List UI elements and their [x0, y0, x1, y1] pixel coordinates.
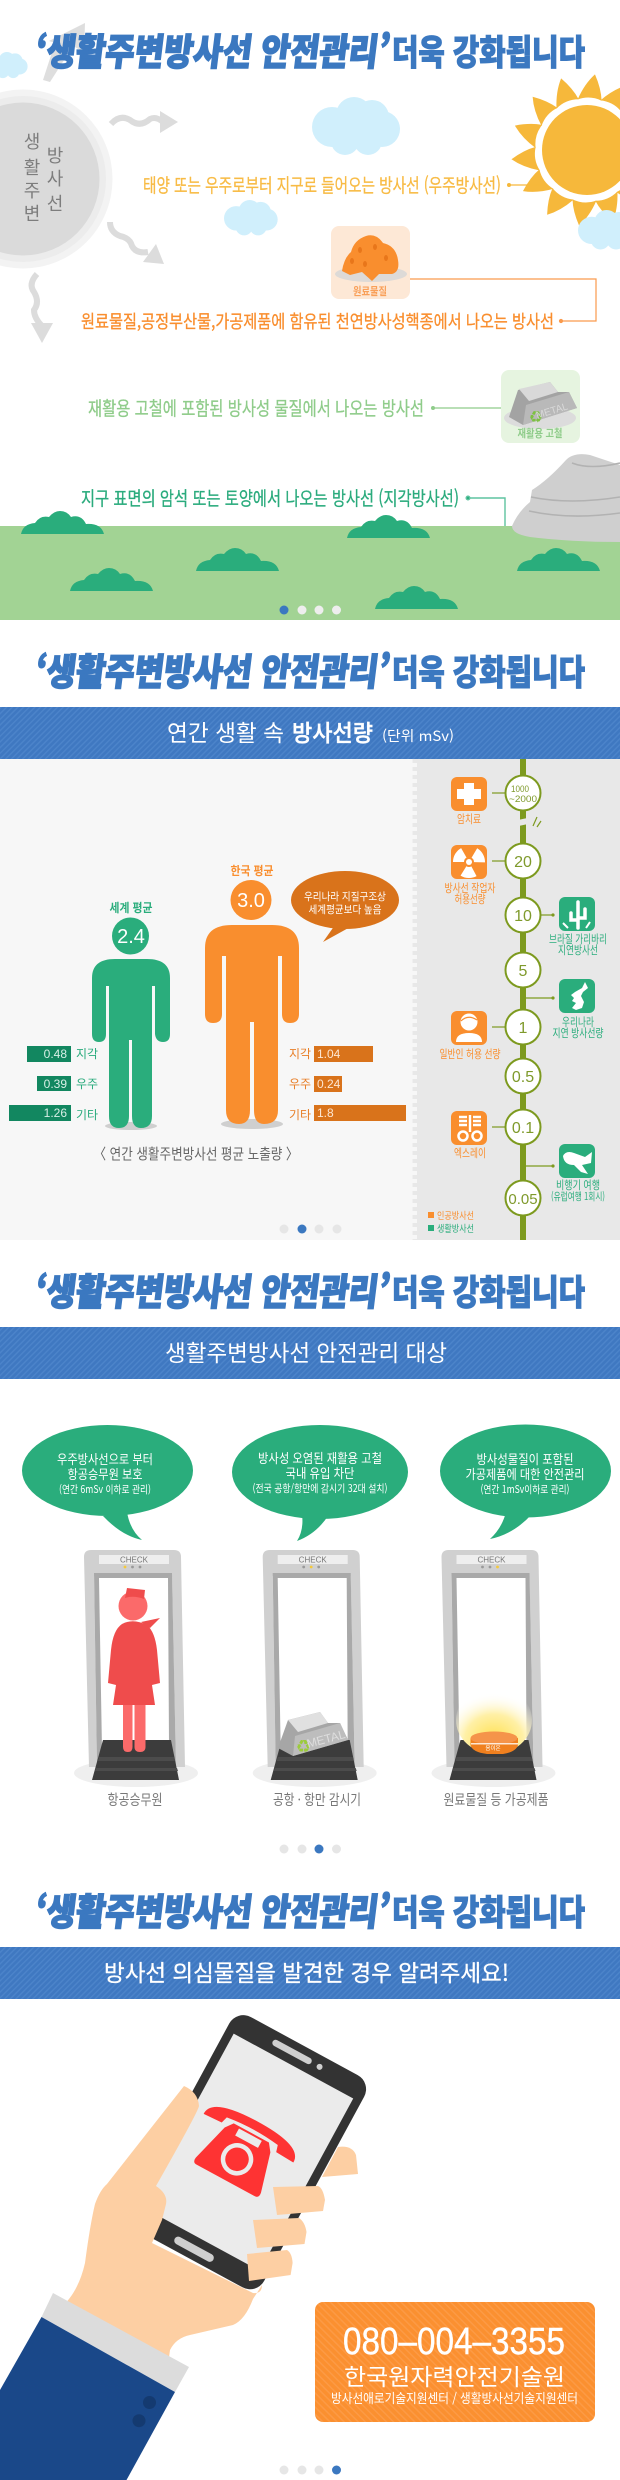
figure: Korea average: 3.0: [237, 890, 265, 912]
bush 4: [70, 568, 153, 591]
caption: 〈 연간 생활주변방사선 평균 노출량 〉: [94, 1143, 298, 1164]
card: recycled scrap metal: 재활용 고철: [518, 425, 562, 441]
title: ‘생활주변방사선 안전관리’: [33, 642, 393, 696]
bars: world average: 지각: [76, 1047, 98, 1061]
banner heading: 생활주변방사선 안전관리 대상: [165, 1334, 447, 1368]
bars: world average: 1.26: [44, 1106, 67, 1120]
bars: Korea average: 기타: [289, 1108, 311, 1122]
legend: 생활방사선: [437, 1221, 474, 1235]
banner heading: [0, 707, 620, 759]
bars: world average: 0.39: [44, 1077, 67, 1091]
hand: [60, 2086, 262, 2365]
scale: dose values: 0.1: [512, 1120, 534, 1137]
bush 5: [375, 586, 458, 609]
contact box: 080–004–3355: [343, 2321, 565, 2363]
icon: general public person: 일반인 허용 선량: [440, 1046, 501, 1062]
panel: section 2 annual radiation dose: [0, 642, 620, 1240]
gate 2: airport and port monitor: CHECK: [299, 1556, 327, 1564]
icon: Brazil Guarapari cactus: [549, 897, 607, 958]
banner heading: [0, 1947, 620, 1999]
bars: Korea average: 0.24: [317, 1077, 341, 1091]
icon: Korea map: 우리나라: [562, 1014, 594, 1030]
finger 1: [273, 2186, 325, 2215]
scale: dose values: 1: [519, 1020, 528, 1037]
finger behind phone: [322, 2147, 358, 2177]
callout: processed products: 가공제품에 대한 안전관리: [466, 1464, 584, 1483]
card: recycled scrap metal: METAL: [535, 401, 570, 422]
icon: Korea map: [552, 979, 604, 1041]
finger 2: [253, 2218, 306, 2248]
bars: world average: 0.48: [44, 1047, 67, 1061]
banner heading: [0, 1327, 620, 1379]
bars: world average: [9, 1046, 98, 1122]
panel: section 4 report hotline: [0, 1882, 620, 2480]
title: ‘생활주변방사선 안전관리’: [33, 1882, 393, 1936]
icon: airplane: [551, 1144, 605, 1204]
panel: section 3 management targets: [0, 1262, 620, 1854]
circle: living environment radiation: 활: [24, 158, 40, 178]
circle: living environment radiation: 방: [47, 146, 63, 166]
scale: dose values: 5: [519, 963, 528, 980]
icon: x-ray: [451, 1111, 487, 1161]
arrow: wave downward: [31, 274, 53, 343]
connector: raw material: [410, 279, 596, 322]
contact box: 방사선애로기술지원센터 / 생활방사선기술지원센터: [331, 2388, 578, 2407]
left background: [0, 759, 417, 1240]
circle: living environment radiation: 변: [24, 204, 40, 224]
label: Korea average: 한국 평균: [230, 862, 274, 879]
connector: terrestrial radiation: [466, 496, 505, 526]
callout: airport and port monitors: [232, 1425, 408, 1541]
label: world average: 세계 평균: [110, 899, 152, 916]
gate 1: flight attendant scanner: CHECK: [120, 1556, 149, 1564]
callout: processed products: [440, 1424, 611, 1539]
bush 6: [517, 548, 600, 571]
figure: flight attendant: [108, 1588, 160, 1752]
callout: flight attendants: [22, 1425, 193, 1540]
scale: dose values: [508, 784, 538, 1208]
pagination dots: [280, 1224, 342, 1234]
cloud large: [312, 97, 400, 155]
bars: world average: 기타: [76, 1108, 98, 1122]
shirt cuff: [42, 2293, 189, 2392]
icon: Korea map: 지연 방사선량: [552, 1025, 604, 1041]
scale: dose values: 20: [514, 854, 532, 871]
glow: [456, 1686, 532, 1754]
panel: section 1 natural radiation sources: [0, 22, 620, 620]
callout: processed products: 방사성물질이 포함된: [476, 1449, 574, 1468]
circle: living environment radiation: 사: [47, 169, 64, 189]
circle: living environment radiation: [0, 90, 112, 268]
legend: [428, 1208, 474, 1235]
arrow: upward behind title: [43, 23, 85, 82]
gate 2: airport and port monitor: [253, 1550, 377, 1787]
cloud small: [224, 200, 278, 235]
scale: dose values: 0.05: [508, 1191, 538, 1208]
figure: world average: [92, 918, 170, 1130]
callout: airport and port monitors: 방사성 오염된 재활용 고철: [258, 1448, 382, 1467]
rock mountain: [512, 454, 620, 542]
bars: Korea average: 지각: [289, 1047, 311, 1061]
cloud right: [578, 210, 620, 249]
icon: glowing product: [470, 1732, 518, 1754]
scale: dose values: ~2000: [509, 794, 537, 805]
connector: recycled scrap: [431, 406, 502, 410]
callout: higher than world average: 우리나라 지질구조상: [304, 889, 386, 904]
bush 3: [196, 548, 279, 571]
title: ‘생활주변방사선 안전관리’: [33, 22, 393, 76]
icon: glowing product: 음이온: [485, 1744, 501, 1752]
bars: Korea average: 1.04: [317, 1047, 341, 1061]
scale: dose values: 1000: [511, 784, 529, 795]
card: raw material: 원료물질: [353, 283, 387, 299]
icon: cancer therapy cross: [451, 777, 487, 827]
scale: dose markers: [506, 776, 540, 1216]
pagination dots: [280, 2466, 341, 2474]
icon: metal ingot: METAL: [305, 1727, 347, 1751]
icon: red telephone: [181, 2097, 302, 2205]
callout: airport and port monitors: (전국 공항/항만에 감시기 32대 설치): [252, 1481, 388, 1496]
contact box: 한국원자력안전기술원: [344, 2358, 565, 2392]
phone: [122, 2009, 372, 2295]
connectors: scale to icons: [492, 793, 554, 1167]
icon: general public person: [440, 1011, 501, 1062]
banner heading: 방사선 의심물질을 발견한 경우 알려주세요!: [104, 1954, 509, 1988]
arrow: wave to lower right: [110, 222, 164, 264]
callout: flight attendants: 우주방사선으로 부터: [57, 1449, 153, 1468]
figure: world average: 2.4: [117, 926, 145, 948]
callout: processed products: (연간 1mSv이하로 관리): [480, 1482, 570, 1497]
circle: living environment radiation: 생: [24, 132, 40, 152]
icon: metal ingot: [278, 1712, 348, 1756]
bush 2: [347, 515, 430, 538]
banner heading: (단위 mSv): [382, 726, 454, 746]
ground: [0, 526, 620, 620]
circle: living environment radiation: 선: [47, 194, 63, 214]
callout: airport and port monitors: 국내 유입 차단: [286, 1463, 355, 1482]
dose scale axis: [516, 759, 541, 1240]
icon: x-ray: 엑스레이: [454, 1145, 486, 1161]
card: recycled scrap metal: [501, 370, 580, 443]
scale: dose values: 0.5: [512, 1069, 534, 1086]
legend: 인공방사선: [437, 1208, 474, 1222]
scale: dose values: 10: [514, 908, 532, 925]
callout: flight attendants: 항공승무원 보호: [68, 1464, 143, 1483]
icon: radiation worker: 허용선량: [454, 891, 486, 907]
banner heading: 방사선량: [292, 714, 373, 748]
label: processed products: 원료물질 등 가공제품: [444, 1789, 548, 1810]
circle: living environment radiation: 주: [24, 181, 40, 201]
right background: [415, 759, 620, 1240]
icon: airplane: 비행기 여행: [556, 1177, 600, 1193]
title: ‘생활주변방사선 안전관리’: [33, 1262, 393, 1316]
pagination dots: [280, 606, 341, 614]
label: flight attendant: 항공승무원: [108, 1789, 162, 1810]
finger 3: [247, 2250, 293, 2281]
text: recycled scrap radiation: 재활용 고철에 포함된 방사성 물질에서 나오는 방사선: [88, 394, 424, 421]
icon: metal ingot: ♻: [297, 1739, 310, 1754]
label: airport port monitor: 공항 · 항만 감시기: [273, 1789, 361, 1810]
callout: higher than world average: [291, 871, 399, 942]
icon: cancer therapy cross: 암치료: [457, 811, 481, 827]
icon: radiation worker: 방사선 작업자: [444, 880, 496, 896]
gate 3: processed product: CHECK: [477, 1556, 506, 1564]
card: recycled scrap metal: ♻: [530, 410, 542, 424]
bars: Korea average: 1.8: [317, 1106, 334, 1120]
callout: higher than world average: 세계평균보다 높음: [308, 902, 382, 917]
figure: Korea average: [205, 880, 299, 1129]
arrow: wave to the right: [111, 111, 178, 133]
text: cosmic radiation: 태양 또는 우주로부터 지구로 들어오는 방사선 (우주방사선): [143, 171, 501, 198]
gate 1: flight attendant scanner: [74, 1550, 198, 1787]
gate 3: processed product: [432, 1550, 556, 1787]
bars: world average: 우주: [76, 1077, 98, 1091]
banner heading: 연간 생활 속: [167, 714, 284, 748]
connector: cosmic radiation to sun: [507, 183, 545, 187]
text: terrestrial radiation: 지구 표면의 암석 또는 토양에서 나오는 방사선 (지각방사선): [81, 484, 459, 511]
callout: flight attendants: (연간 6mSv 이하로 관리): [59, 1482, 151, 1497]
contact box: [315, 2302, 595, 2422]
icon: Brazil Guarapari cactus: 지연방사선: [558, 942, 598, 958]
suit sleeve: [0, 2317, 175, 2480]
pagination dots: [280, 1844, 341, 1854]
bars: Korea average: 우주: [289, 1077, 311, 1091]
icon: radiation worker: [444, 845, 496, 907]
bars: Korea average: [289, 1046, 406, 1122]
icon: sun: [510, 73, 620, 227]
cloud top left: [0, 52, 28, 78]
bush 1: [21, 511, 104, 534]
card: raw material: [331, 226, 410, 299]
